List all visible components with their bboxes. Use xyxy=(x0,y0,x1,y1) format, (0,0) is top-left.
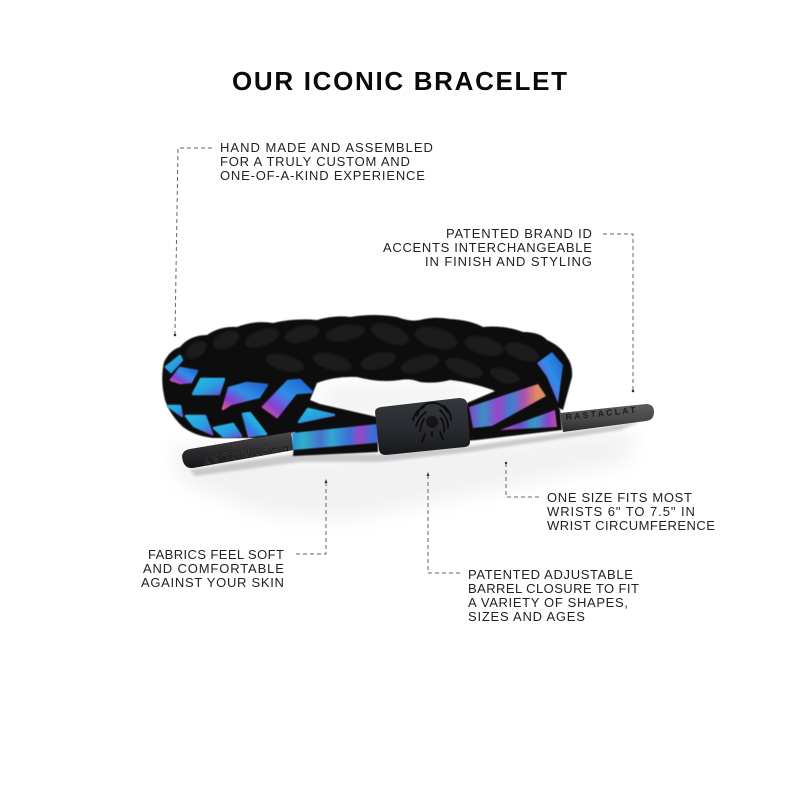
callout: hand made xyxy=(174,140,434,336)
callout: fabrics: AND COMFORTABLE xyxy=(143,561,285,576)
callout: fabrics: FABRICS FEEL SOFT xyxy=(148,547,285,562)
contact shadows xyxy=(190,422,640,476)
callout: barrel closure: SIZES AND AGES xyxy=(468,609,586,624)
callout: one size: ONE SIZE FITS MOST xyxy=(547,490,693,505)
shadow under bracelet xyxy=(172,385,640,520)
left aglet engraving: RASTACLAT xyxy=(203,441,289,465)
barrel closure xyxy=(375,398,470,455)
callout: barrel closure: BARREL CLOSURE TO FIT xyxy=(468,581,640,596)
callout: barrel closure xyxy=(426,472,640,624)
right top patch xyxy=(537,352,563,403)
right strap black surround xyxy=(464,373,562,441)
bracelet xyxy=(162,315,654,476)
callout: fabrics xyxy=(141,479,328,590)
title: OUR ICONIC BRACELET xyxy=(232,66,567,96)
left strap patch xyxy=(292,423,387,450)
right strap lower patch xyxy=(500,410,557,430)
braid strands xyxy=(182,319,542,388)
right aglet engraving: RASTACLAT xyxy=(565,405,637,422)
callout: hand made: HAND MADE AND ASSEMBLED xyxy=(220,140,434,155)
callout: one size xyxy=(505,462,716,533)
callout: one size: WRISTS 6" TO 7.5" IN xyxy=(547,504,696,519)
callout: brand id: IN FINISH AND STYLING xyxy=(425,254,593,269)
braid body xyxy=(162,315,572,456)
callout: fabrics: AGAINST YOUR SKIN xyxy=(141,575,285,590)
callout: barrel closure: A VARIETY OF SHAPES, xyxy=(468,595,629,610)
callout: brand id: ACCENTS INTERCHANGEABLE xyxy=(383,240,593,255)
right strap upper patch xyxy=(469,384,546,428)
left shoelace knot patches xyxy=(166,356,334,437)
callout: barrel closure: PATENTED ADJUSTABLE xyxy=(468,567,634,582)
left aglet xyxy=(182,432,294,468)
callout: hand made: ONE-OF-A-KIND EXPERIENCE xyxy=(220,168,426,183)
callout: brand id xyxy=(383,226,634,392)
callout: one size: WRIST CIRCUMFERENCE xyxy=(547,518,716,533)
callout: hand made: FOR A TRULY CUSTOM AND xyxy=(220,154,411,169)
lion logo xyxy=(413,403,451,442)
callout: brand id: PATENTED BRAND ID xyxy=(446,226,593,241)
right aglet xyxy=(560,404,654,432)
